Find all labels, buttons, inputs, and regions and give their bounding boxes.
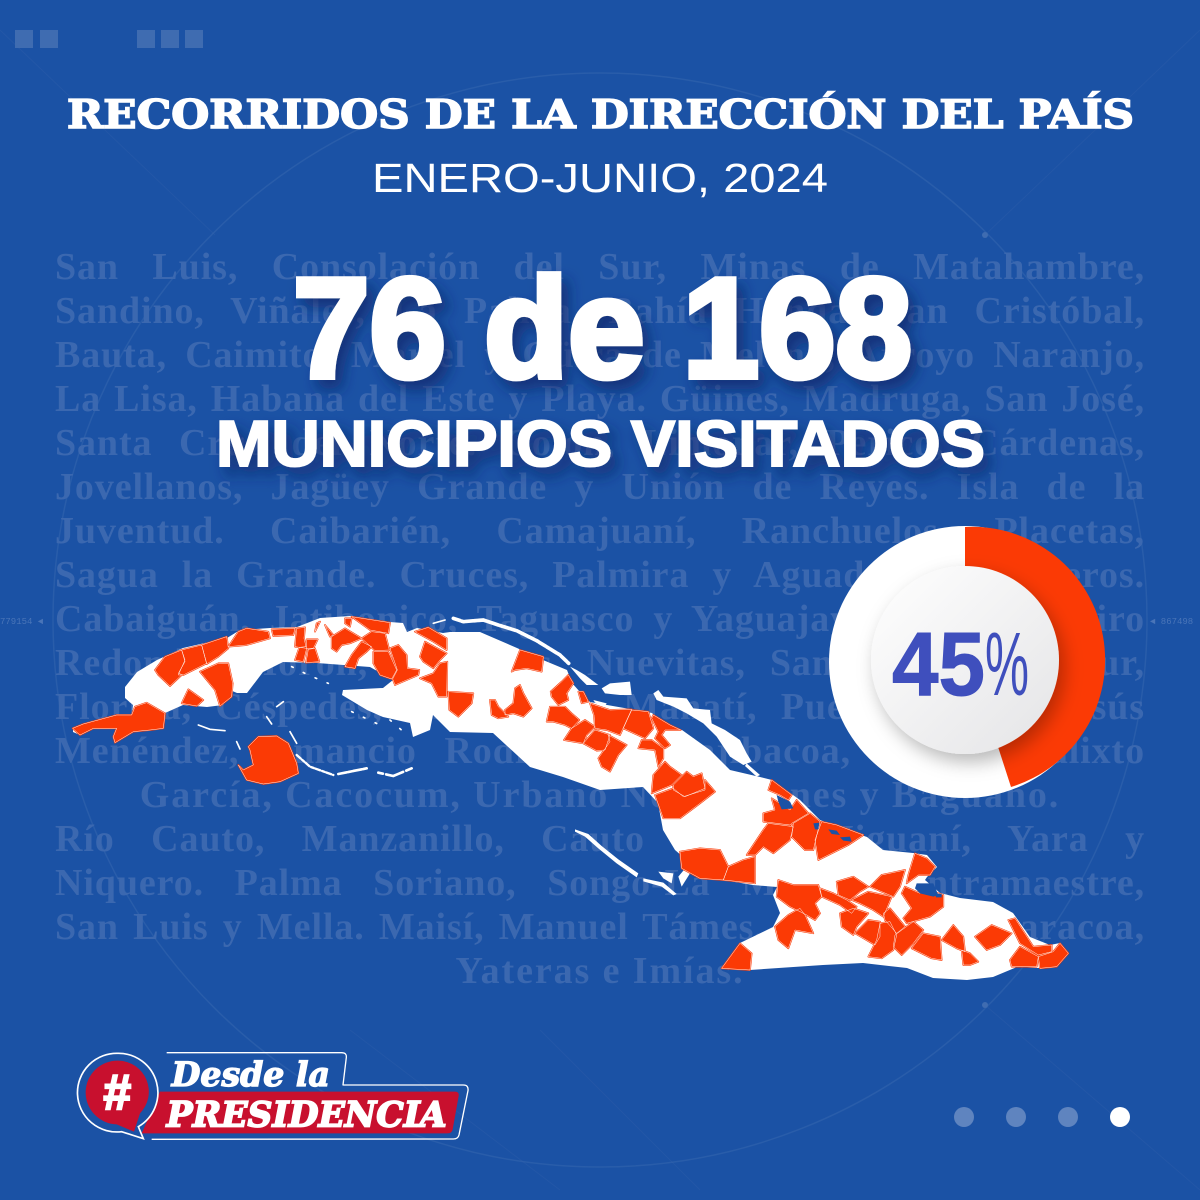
background decoration: ◄ 867498 <box>1150 617 1193 627</box>
donut chart 45% <box>829 526 1105 798</box>
western cays <box>198 618 569 776</box>
donut slice <box>965 527 1105 787</box>
background text: list of municipalities: Santa Cruz del Norte. Colón, Limonar, Perico, Cárdenas, <box>55 422 1145 464</box>
speech bubble fill <box>86 1061 149 1132</box>
title: RECORRIDOS DE LA DIRECCIÓN DEL PAÍS <box>67 91 1134 138</box>
red band <box>142 1092 459 1133</box>
background text: list of municipalities: Redondo, Morón, Chambas. Nuevitas, Santa Cruz del Sur, <box>55 642 1145 684</box>
map of Cuba <box>73 616 1068 980</box>
background text: list of municipalities: Yateras e Imías. <box>456 950 744 992</box>
percent value: % <box>985 615 1029 715</box>
background text: list of municipalities: Florida, Céspedes, Esmeralda, Manatí, Puerto Padre, Jesús <box>55 686 1145 728</box>
logo: Desde la Presidencia <box>77 1053 468 1139</box>
northern and southern cays <box>570 667 760 895</box>
background text: list of municipalities: Río Cauto, Manzanillo, Cauto Cristo, Jiguaní, Yara y <box>55 818 1145 860</box>
eastern bays <box>777 795 942 897</box>
municipalities visited: solid fill <box>73 617 1068 970</box>
municipal boundaries <box>73 617 1068 970</box>
hash symbol: # <box>103 1064 131 1120</box>
pagination dots <box>954 1107 1130 1127</box>
inner disc <box>871 566 1059 754</box>
donut base <box>829 526 1101 798</box>
subtitle: ENERO-JUNIO, 2024 <box>372 155 828 201</box>
background text: list of municipalities: Menéndez, Amancio Rodríguez, Majibacoa, Sagua, Calixto <box>55 730 1145 772</box>
background text: list of municipalities: Niquero. Palma Soriano, Songo-La Maya, Contramaestre, <box>55 862 1145 904</box>
percent value: 45 <box>892 615 985 715</box>
logo line two: PRESIDENCIA <box>166 1095 447 1136</box>
background text: list of municipalities: García, Cacocum, Urbano Noris, Banes y Báguano. <box>140 774 1060 816</box>
background decoration: 779154 ◄ <box>0 617 44 627</box>
eastern municipalities <box>680 780 1068 970</box>
background text: list of municipalities: Sagua la Grande. Cruces, Palmira y Aguada de Pasajeros. <box>55 554 1145 596</box>
island silhouette <box>73 616 1068 980</box>
headline label: MUNICIPIOS VISITADOS <box>216 407 985 480</box>
background text: list of municipalities: Bauta, Caimito, Mariel y Güira de Melena, Arroyo Naranjo, <box>55 334 1145 376</box>
background text: list of municipalities: La Lisa, Habana del Este y Playa. Güines, Madruga, San José, <box>55 378 1145 420</box>
speech bubble outline <box>77 1053 158 1139</box>
logo line one: Desde la <box>171 1055 330 1094</box>
central municipalities <box>547 675 715 818</box>
background text: list of municipalities: Juventud. Caibarién, Camajuaní, Ranchuelos, Placetas, <box>55 510 1145 552</box>
headline number: 76 de 168 <box>293 249 912 408</box>
background text: list of municipalities: Cabaiguán, Jatibonico, Taguasco y Yaguajay. Florencia, Ciro <box>55 598 1145 640</box>
background text: list of municipalities: San Luis y Mella. Maisí, Manuel Támes, Caimanera, Baracoa, <box>55 906 1145 948</box>
background text: list of municipalities: San Luis, Consolación del Sur, Minas de Matahambre, <box>55 246 1145 288</box>
background text: list of municipalities: Sandino, Viñales, La Palma, Bahía Honda, San Cristóbal, <box>55 290 1145 332</box>
western municipalities <box>73 617 543 784</box>
background text: list of municipalities: Jovellanos, Jagüey Grande y Unión de Reyes. Isla de la <box>55 466 1145 508</box>
logo outline <box>152 1053 468 1139</box>
